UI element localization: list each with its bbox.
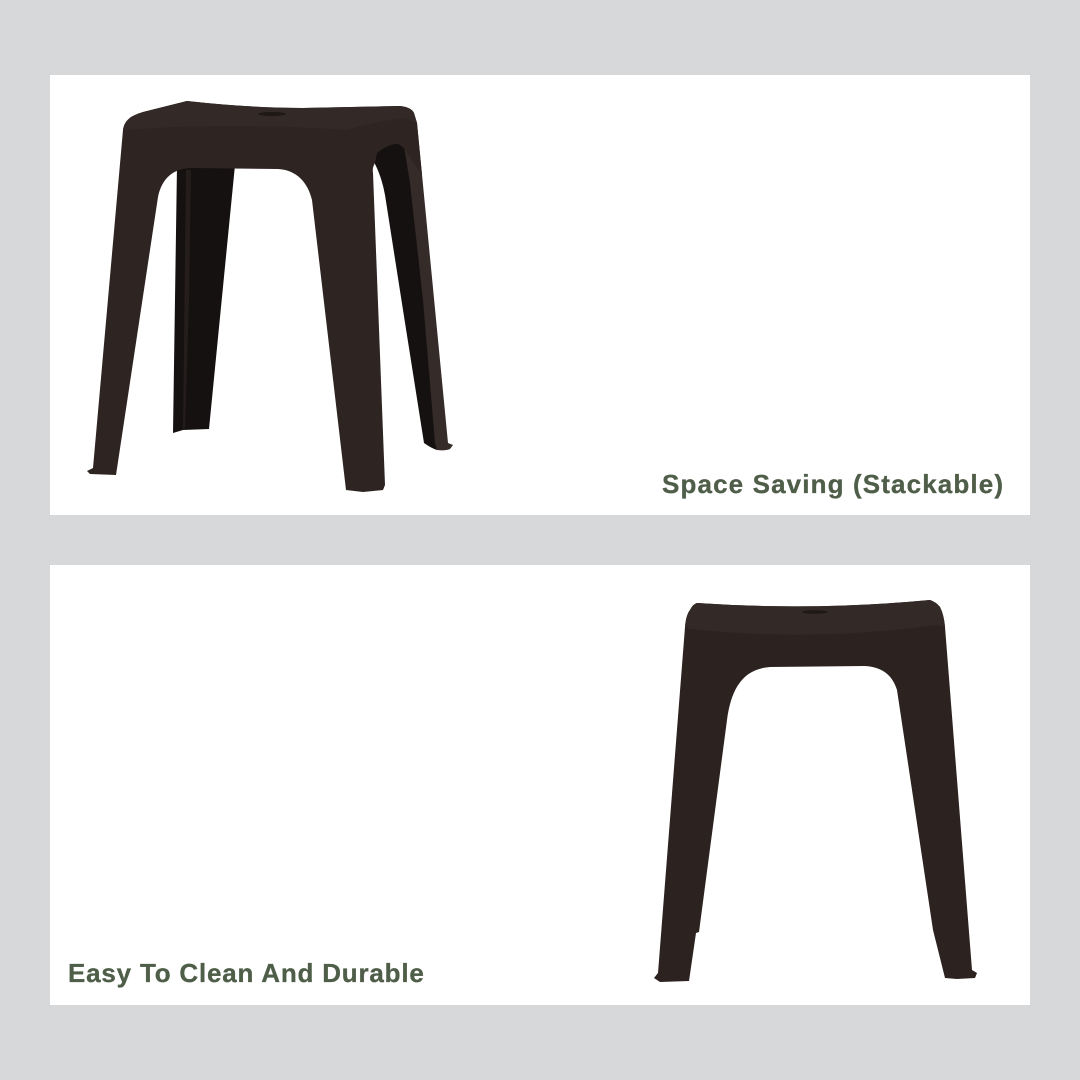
icon: stool front view (654, 600, 977, 982)
caption: space saving: Space Saving (Stackable) (662, 469, 1004, 499)
panel: easy to clean (50, 565, 1030, 1005)
panel: space saving (50, 75, 1030, 515)
icon: stool three-quarter view (87, 101, 453, 492)
caption: easy to clean: Easy To Clean And Durable (68, 958, 425, 988)
